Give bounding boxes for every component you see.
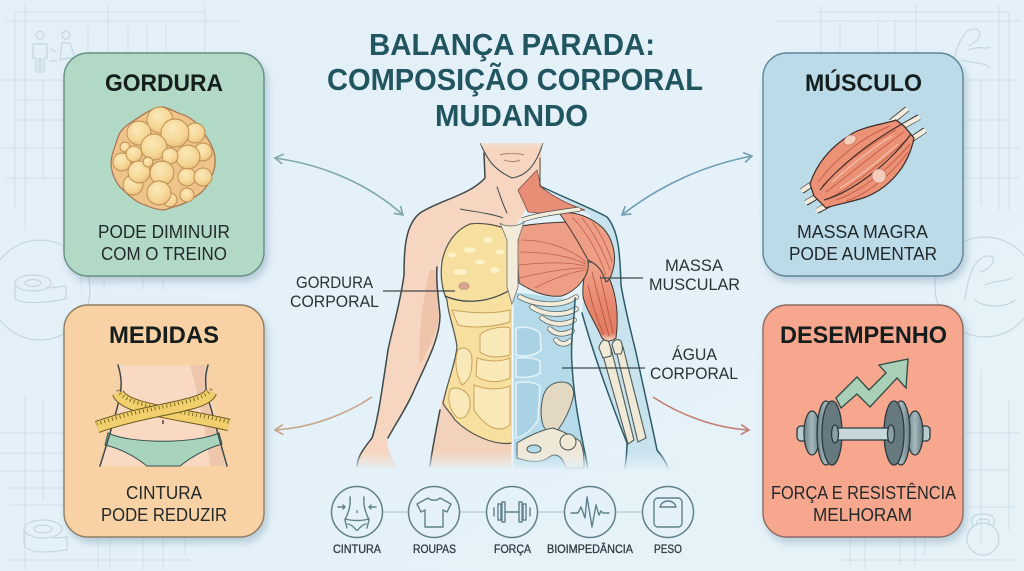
leader: massa muscular [600,277,643,279]
title [327,28,703,133]
text: força e resistência: MELHORAM [813,505,912,525]
text: pode diminuir: PODE DIMINUIR [98,222,230,242]
panel: medidas [64,305,264,537]
text: cintura pode reduzir [101,483,227,525]
top fade [465,136,555,148]
fat highlights [448,237,504,275]
nipple [459,282,469,290]
indicator: bioimpedância [547,486,633,556]
text: cintura pode reduzir: PODE REDUZIR [101,505,227,525]
text: massa magra: MASSA MAGRA [797,222,928,242]
title: BALANÇA PARADA: [369,28,655,62]
text: pode diminuir: COM O TREINO [101,244,227,264]
panel: músculo [763,53,963,276]
left arm, shoulder and neck [357,143,512,468]
label: água corporal [650,345,738,383]
panel: desempenho [763,305,963,537]
label: FORÇA [494,544,531,556]
forearm bones [599,339,646,444]
text: pode diminuir [98,222,230,264]
label: água corporal: ÁGUA [672,345,718,364]
ribs [520,297,576,344]
right arm fluid layer [540,186,668,468]
label: gordura corporal [290,273,379,311]
deltoid [560,213,615,282]
heading: gordura: GORDURA [105,70,223,97]
abdominal fat blocks [449,310,510,429]
background icon: flexed arm [954,29,990,68]
label: CINTURA [333,544,381,556]
indicator: peso [642,486,694,556]
label: água corporal: CORPORAL [650,364,738,383]
panel: gordura [64,53,264,276]
background icon: tape in circle [0,240,90,340]
indicator: força [486,486,538,556]
label: massa muscular: MASSA [665,256,724,275]
pectoral muscle [518,222,588,296]
arrow: músculo to body [622,156,752,215]
connector between indicators [383,511,642,513]
background icon: kettlebell [967,514,999,555]
label: massa muscular [649,256,740,294]
right neck [512,143,542,232]
heading: desempenho: DESEMPENHO [780,322,947,349]
background icon: arm in circle [935,237,1024,337]
heading: músculo: MÚSCULO [805,69,922,97]
indicator: roupas [408,486,460,556]
body illustration [357,136,668,468]
heading: medidas: MEDIDAS [109,322,219,349]
label: gordura corporal: GORDURA [296,273,374,292]
biceps [583,262,617,341]
abdominal water segments [516,327,541,438]
label: massa muscular: MUSCULAR [649,275,740,294]
chin and mouth [480,143,543,178]
text: massa magra: PODE AUMENTAR [789,244,937,264]
title: MUDANDO [435,99,588,133]
background icon: measuring tape [24,520,67,552]
label: gordura corporal: CORPORAL [290,292,379,311]
icon: muscle [802,109,925,211]
lower torso skin [430,400,512,468]
neck muscles [518,170,585,214]
background icon: people [33,31,75,72]
leader: gordura corporal [383,290,455,292]
text: força e resistência: FORÇA E RESISTÊNCIA [771,483,956,503]
text: massa magra [789,222,937,264]
label: PESO [654,544,682,556]
icon: fat cells [111,107,215,210]
body fat [441,223,512,443]
centre divider [512,300,514,468]
icon: waist with tape [97,365,229,466]
left body outlines [357,153,485,466]
chest fold [445,290,510,301]
sternum [500,222,524,304]
text: cintura pode reduzir: CINTURA [126,483,202,503]
icon: dumbbell with rising arrow [797,359,930,465]
left arm shading [419,270,439,365]
hip bone [517,382,584,468]
arrow: body to medidas [275,397,372,430]
text: força e resistência [771,483,956,525]
water torso [513,292,588,468]
outer and inner lines of the right arm [540,186,668,468]
leader: água corporal [562,367,645,369]
clavicles [460,209,580,220]
arrow: body to desempenho [653,397,749,430]
label: BIOIMPEDÂNCIA [547,543,633,556]
neck lines [497,158,540,213]
indicator: cintura [332,486,382,556]
label: ROUPAS [413,544,456,556]
arrow: gordura to body [275,158,403,215]
title: COMPOSIÇÃO CORPORAL [327,62,703,97]
